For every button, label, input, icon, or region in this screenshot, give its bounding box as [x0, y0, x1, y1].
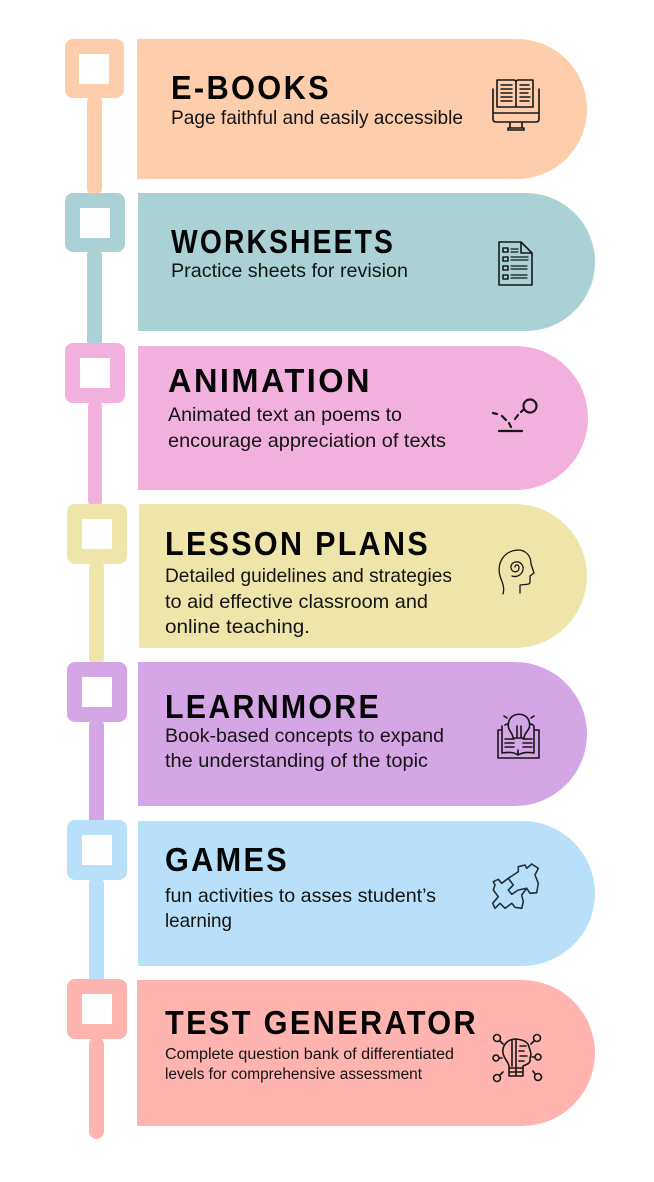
text: animation description: Animated text an poems to [168, 404, 402, 426]
panel: test generator: levels for comprehensive assessment [165, 1066, 423, 1083]
timeline marker: worksheets [65, 193, 125, 346]
panel: games [138, 821, 595, 966]
icon: brain light bulb network [493, 1034, 542, 1082]
heading: test generator: TEST GENERATOR [165, 1004, 478, 1041]
panel: animation [138, 346, 588, 490]
text: games description: fun activities to asses student’s [165, 885, 436, 907]
icon: checklist document [499, 242, 532, 285]
panel: lesson plans: online teaching. [165, 616, 310, 638]
heading: learnmore: LEARNMORE [165, 688, 381, 725]
heading: games: GAMES [165, 841, 289, 878]
panel: worksheets [138, 193, 595, 331]
panel: lesson plans: to aid effective classroom and [165, 591, 428, 613]
timeline marker: learnmore [67, 662, 127, 823]
panel: learnmore [138, 662, 587, 806]
panel: test generator [137, 980, 595, 1126]
text: lesson plans description: Detailed guidelines and strategies [165, 565, 452, 587]
timeline marker: animation [65, 343, 125, 506]
timeline marker: lesson plans [67, 504, 127, 664]
heading: animation: ANIMATION [168, 362, 372, 399]
icon: light bulb over book [498, 714, 539, 758]
heading: worksheets: WORKSHEETS [171, 223, 395, 260]
text: learnmore description: Book-based concepts to expand [165, 725, 444, 747]
timeline marker: e-books [65, 39, 124, 194]
text: e-books description: Page faithful and easily accessible [171, 107, 463, 129]
panel: lesson plans [139, 504, 587, 648]
icon: puzzle pieces [493, 864, 538, 908]
timeline marker: test generator [67, 979, 127, 1139]
icon: head with spiral [499, 550, 534, 594]
timeline marker: games [67, 820, 127, 982]
icon: book on monitor [493, 80, 539, 130]
heading: lesson plans: LESSON PLANS [165, 525, 430, 562]
panel: games: learning [165, 910, 232, 932]
panel: animation: encourage appreciation of texts [168, 430, 446, 452]
icon: bouncing ball [493, 400, 536, 431]
panel: e-books [137, 39, 587, 179]
heading: e-books: E-BOOKS [171, 69, 331, 106]
text: test generator description: Complete question bank of differentiated [165, 1046, 454, 1063]
panel: learnmore: the understanding of the topic [165, 750, 428, 772]
text: worksheets description: Practice sheets for revision [171, 260, 408, 282]
